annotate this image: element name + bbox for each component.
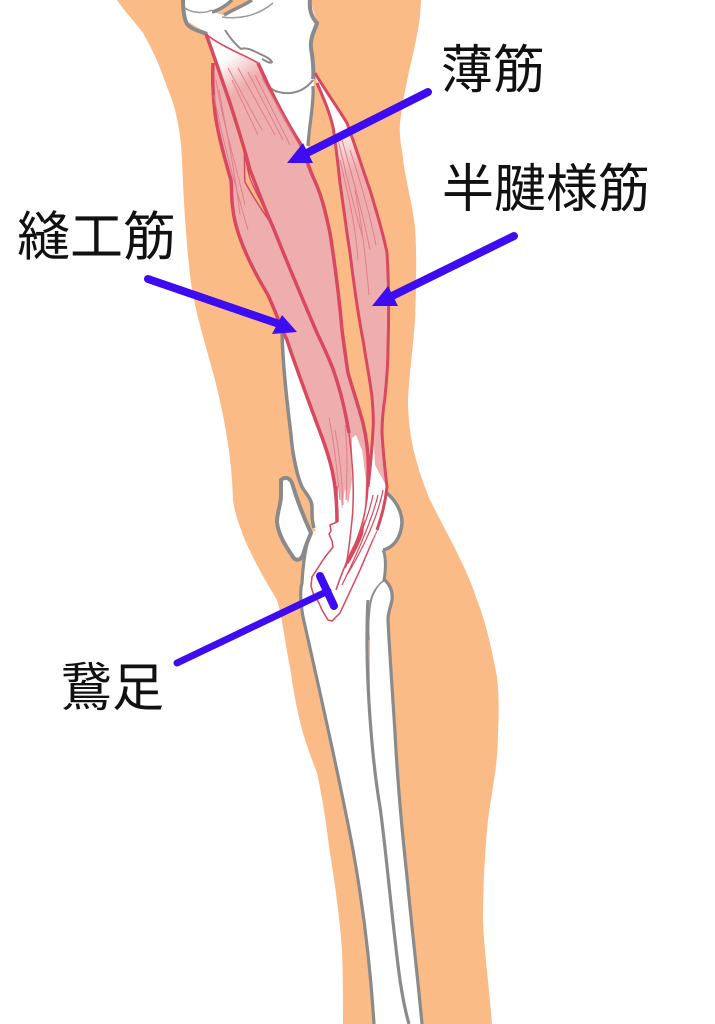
muscle: sartorius (213, 63, 352, 522)
fibula (368, 580, 422, 1024)
label: semitendinosus: 半腱様筋 (442, 161, 650, 219)
arrow: semitendinosus (372, 236, 514, 306)
pes anserinus insertion tendon (311, 470, 387, 621)
tibia (301, 522, 409, 1024)
label: sartorius: 縫工筋 (17, 208, 176, 267)
T-marker: pes anserinus (177, 576, 334, 663)
patella (277, 478, 311, 560)
muscle: semitendinosus (315, 73, 389, 590)
arrow: sartorius (148, 279, 297, 334)
arrow: gracilis (287, 92, 428, 163)
leg silhouette (117, 0, 499, 1024)
muscle: gracilis (206, 34, 368, 566)
label: pes anserinus: 鵞足 (60, 660, 164, 718)
femur and pelvis (183, 0, 402, 560)
slit between sartorius and gracilis (244, 150, 273, 226)
label: gracilis: 薄筋 (441, 42, 545, 100)
